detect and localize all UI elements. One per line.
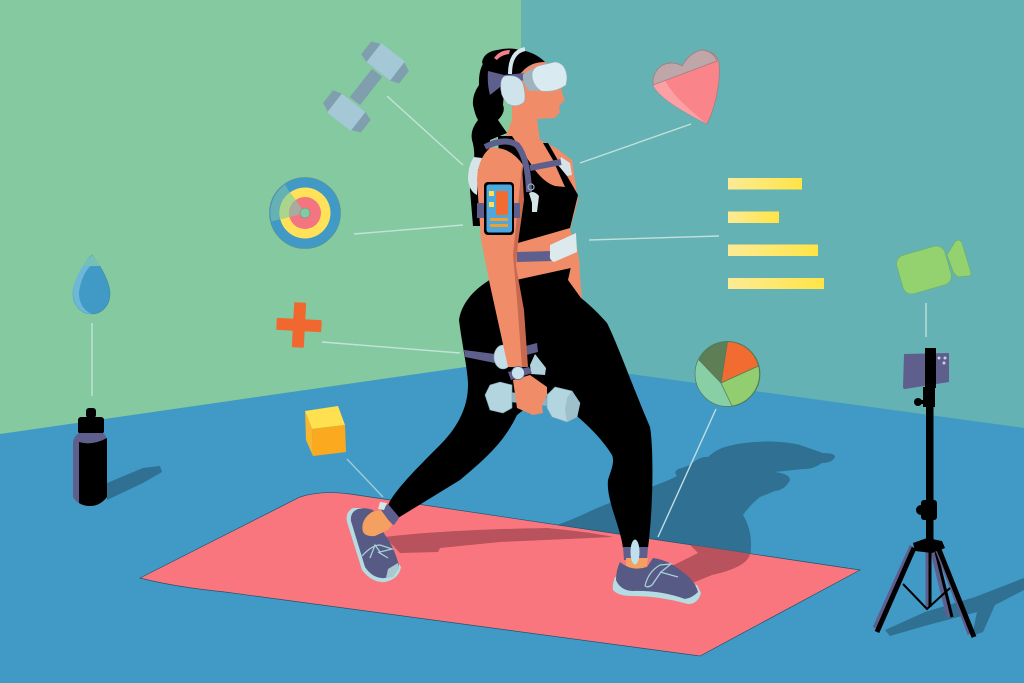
right shoe [613,558,701,604]
phone [903,353,949,389]
rear dumbbell [530,354,546,375]
leggings [388,262,652,548]
exercise mat [140,493,860,656]
camera lenses [938,356,946,364]
left shoe [347,502,401,582]
woman figure [347,48,701,604]
icon: heart [653,50,719,124]
earcup [501,76,525,106]
hand [513,375,547,415]
icon: dumbbell [320,38,412,136]
tripod legs [875,545,974,637]
dumbbell in hand [485,382,580,422]
shoulder sensors [468,157,572,195]
connector line: pie chart to ankle [658,409,716,537]
icon: pie chart [695,342,760,406]
sports bra [498,136,578,243]
hair cap [482,48,545,85]
whistle [528,184,539,212]
VR visor [523,62,567,91]
torso [500,133,580,280]
arm [477,148,527,367]
connector lines [92,96,926,396]
waist pouch [550,233,577,262]
icon: yellow bars list [728,178,824,289]
front ankle strap [380,505,399,525]
connector line: cube to foot [347,459,383,497]
figure shadow on floor [550,442,835,570]
headphone band [510,49,525,74]
fitness phone on arm [484,182,514,235]
headband [494,50,510,60]
tripod pole and clamp [914,348,937,542]
icon: medical plus [276,302,322,348]
figure shadow on mat [385,528,750,584]
icon: video camera [894,240,971,296]
tripod with phone [875,348,974,637]
headset strap [488,71,525,95]
right ankle strap [623,547,648,560]
ponytail [470,55,507,226]
face [507,60,565,140]
tripod shadow [885,578,1024,636]
wristwatch [508,366,532,380]
ankle sensor [630,540,640,564]
waist belt [517,251,552,262]
bottle shadow [107,466,162,500]
icon: yellow cube [305,406,346,456]
vest straps [485,141,561,192]
water bottle [73,408,107,506]
thigh band [464,343,538,363]
armband [477,203,520,218]
far arm [566,245,582,300]
arm shadow [513,165,528,367]
icon: target ring chart [270,178,340,248]
icon: water drop [73,255,110,314]
tripod hub [913,538,945,553]
thigh sensor disc [494,345,512,369]
